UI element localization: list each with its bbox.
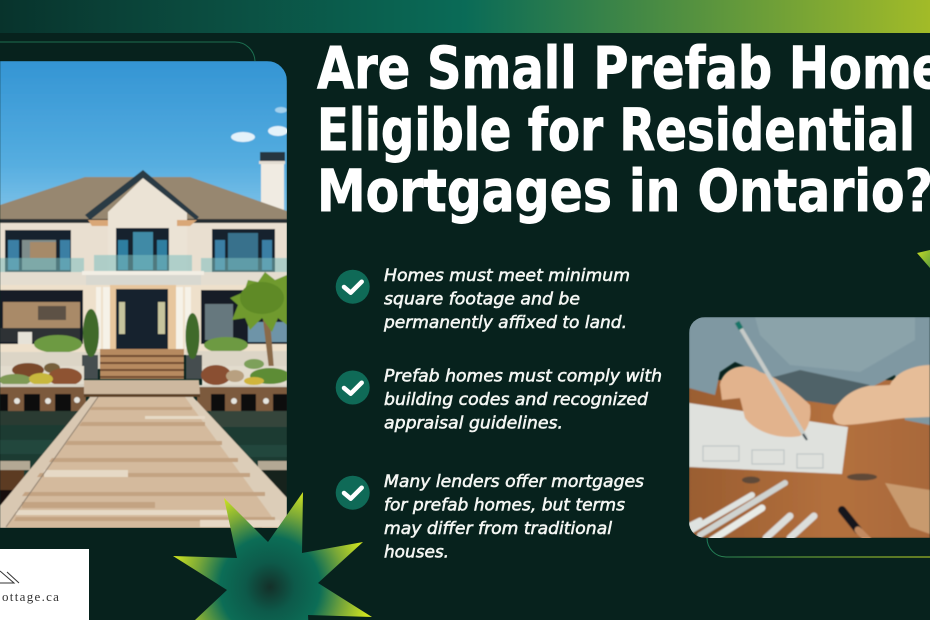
sea walls — [0, 384, 287, 412]
top gradient bar — [0, 0, 930, 33]
text — [384, 472, 644, 562]
eaves — [0, 219, 287, 223]
sketches on paper — [703, 446, 823, 468]
logo text: ottage.ca — [2, 589, 60, 604]
ground floor wall — [0, 285, 287, 355]
side docks — [0, 461, 287, 530]
text: for prefab homes, but terms — [384, 496, 625, 514]
deck — [0, 397, 287, 528]
sweater chest shade — [755, 317, 915, 372]
planters and topiary — [82, 309, 202, 379]
text: appraisal guidelines. — [384, 414, 563, 432]
starburst decoration — [173, 492, 372, 620]
text: square footage and be — [384, 290, 580, 308]
hedges — [34, 335, 248, 353]
water — [0, 411, 287, 476]
starburst corner decoration: right — [917, 250, 930, 268]
sweater — [689, 317, 930, 425]
title — [317, 34, 930, 225]
columns — [96, 287, 191, 349]
check icon — [336, 370, 370, 404]
check item 2 — [336, 366, 662, 432]
text: houses. — [384, 542, 449, 562]
check icon — [336, 270, 370, 304]
cornice — [0, 271, 287, 286]
table marks — [742, 474, 877, 484]
outline accent: bottom right — [707, 538, 930, 557]
logo roof mark — [0, 571, 19, 583]
logo — [0, 549, 89, 620]
text: may differ from traditional — [384, 519, 612, 538]
text: permanently affixed to land. — [383, 313, 627, 332]
retaining walls — [0, 351, 287, 369]
text: Homes must meet minimum — [384, 266, 630, 285]
outline accent: top left — [0, 42, 255, 61]
photo: lakeside house — [0, 61, 290, 530]
chimney — [259, 152, 285, 212]
landing — [84, 380, 200, 397]
sweater shadow — [770, 370, 870, 405]
paper sheet — [689, 403, 848, 474]
check item 1 — [336, 266, 630, 332]
text: Many lenders offer mortgages — [384, 472, 644, 491]
garden beds — [0, 359, 290, 386]
photo: hands drawing floor plans — [689, 317, 930, 540]
roof — [0, 177, 287, 220]
entry recess — [110, 285, 176, 350]
upper wall — [0, 222, 287, 272]
table — [689, 380, 930, 538]
sky — [0, 61, 287, 212]
text — [384, 366, 662, 432]
balcony glass — [0, 255, 287, 272]
check item 3 — [336, 472, 644, 562]
text: building codes and recognized — [384, 390, 649, 409]
front gable — [84, 170, 200, 226]
clouds — [231, 107, 288, 142]
check icon — [336, 476, 370, 510]
text: Prefab homes must comply with — [384, 366, 662, 386]
upper windows — [5, 228, 275, 272]
steps — [100, 349, 184, 379]
right hand — [833, 365, 930, 425]
left hand — [720, 366, 811, 437]
text — [383, 266, 630, 332]
pens — [690, 483, 868, 540]
front door — [116, 289, 168, 349]
logo background — [0, 549, 89, 620]
pencil — [737, 322, 807, 440]
palm tree — [230, 272, 287, 369]
wooden box — [885, 483, 930, 534]
ground floor windows — [0, 290, 287, 344]
